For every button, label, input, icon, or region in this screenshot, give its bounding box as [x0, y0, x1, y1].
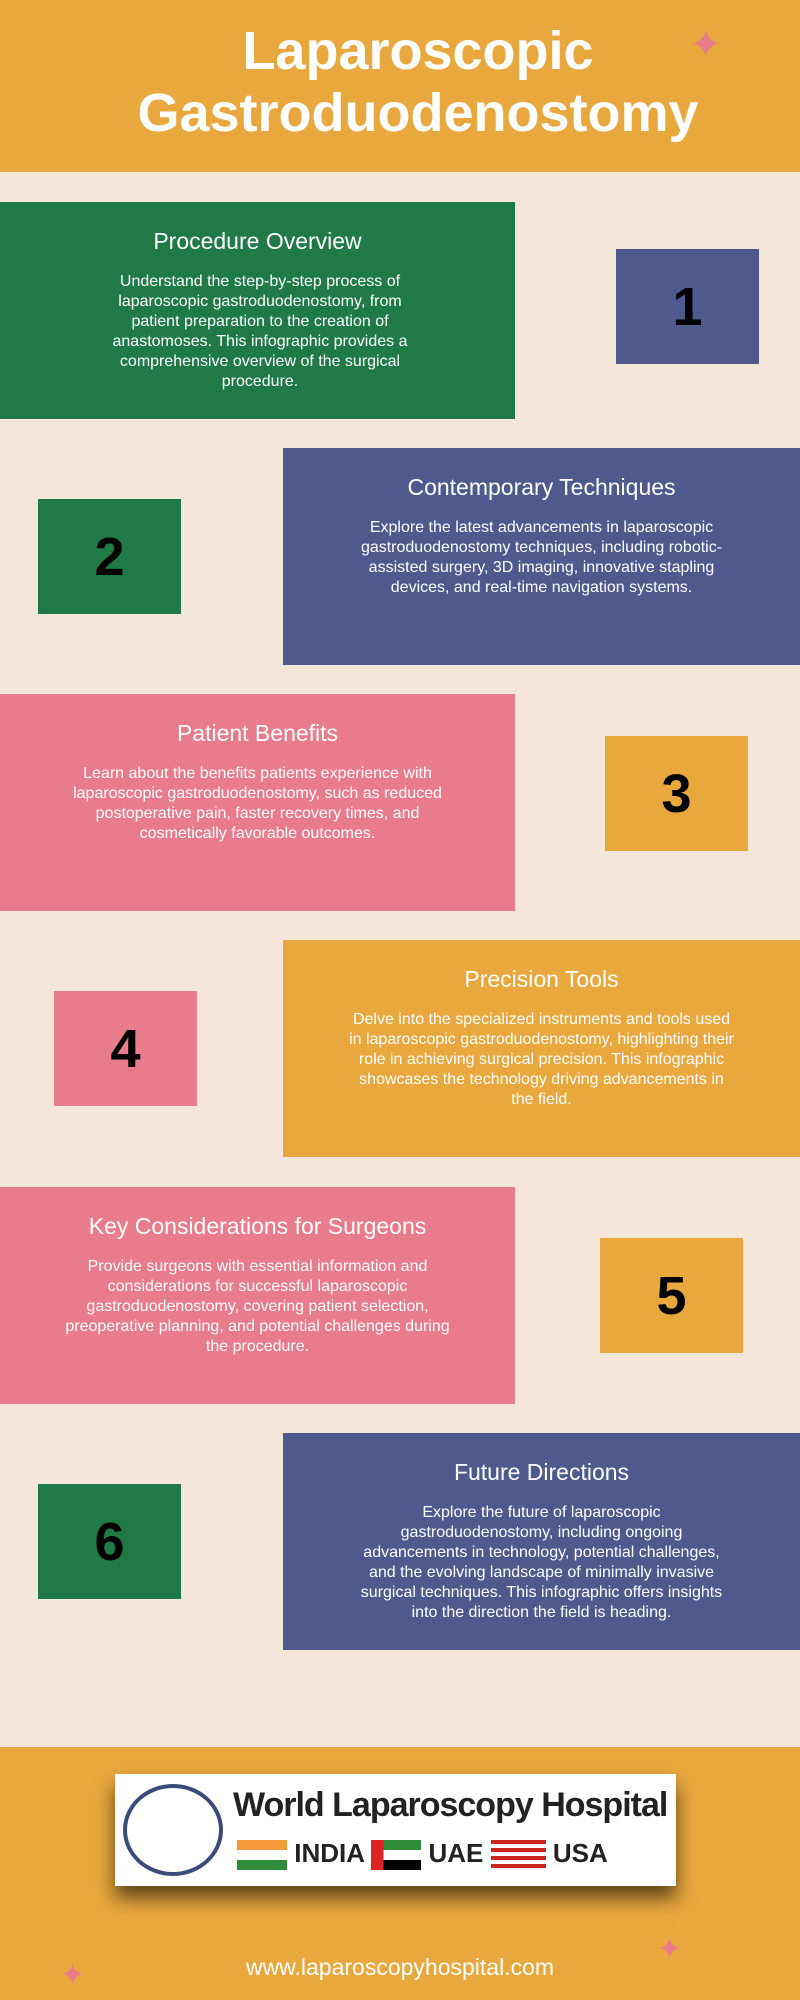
panel: patient benefits — [0, 694, 515, 911]
panel: future directions: Explore the future of laparoscopic gastroduodenostomy, including ongoing advancements in technology, potential challenges, and the evolving landscape of minimally invasive surgical techniques. This infographic offers insights into the direction the field is heading. — [361, 1504, 722, 1621]
logo — [115, 1774, 676, 1886]
panel: precision tools: Delve into the specialized instruments and tools used in laparoscopic gastroduodenostomy, highlighting their role in achieving surgical precision. This infographic showcases the technology driving advancements in the field. — [349, 1011, 734, 1108]
panel: contemporary techniques — [283, 448, 800, 665]
website url: www.laparoscopyhospital.com — [246, 1954, 554, 1980]
panel: key considerations — [0, 1187, 515, 1404]
panel: patient benefits: Learn about the benefits patients experience with laparoscopic gastroduodenostomy, such as reduced postoperative pain, faster recovery times, and cosmetically favorable outcomes. — [73, 765, 442, 842]
number 5 — [600, 1238, 743, 1353]
panel: procedure overview: Understand the step-by-step process of laparoscopic gastroduodenostomy, from patient preparation to the creation of anastomoses. This infographic provides a comprehensive overview of the surgical procedure. — [112, 273, 407, 390]
number 6 — [38, 1484, 181, 1599]
panel: precision tools: Precision Tools — [464, 966, 619, 992]
logo: World Laparoscopy Hospital — [233, 1786, 667, 1824]
panel: procedure overview — [0, 202, 515, 419]
number 6: 6 — [94, 1512, 125, 1572]
number 2 — [38, 499, 181, 614]
title — [137, 21, 699, 143]
number 3 — [605, 736, 748, 851]
icon: star footer left: ✦ — [60, 1959, 85, 1992]
panel: key considerations: Provide surgeons with essential information and considerations for successful laparoscopic gastroduodenostomy, covering patient selection, preoperative planning, and potential challenges during the procedure. — [65, 1258, 450, 1355]
number 4 — [54, 991, 197, 1106]
panel: future directions: Future Directions — [454, 1459, 629, 1485]
number 1 — [616, 249, 759, 364]
number 4: 4 — [110, 1018, 141, 1078]
panel: patient benefits: Patient Benefits — [177, 720, 338, 746]
panel: key considerations: Key Considerations for Surgeons — [89, 1213, 426, 1239]
title: Laparoscopic — [242, 21, 594, 81]
title: Gastroduodenostomy — [137, 83, 699, 143]
panel: future directions — [283, 1433, 800, 1650]
number 1: 1 — [672, 276, 703, 336]
footer — [0, 1747, 800, 2000]
icon: star header: ✦ — [689, 23, 723, 67]
panel: contemporary techniques: Contemporary Techniques — [407, 474, 676, 500]
panel: precision tools — [283, 940, 800, 1157]
number 3: 3 — [661, 764, 692, 824]
icon: star footer right: ✦ — [657, 1933, 682, 1966]
panel: procedure overview: Procedure Overview — [153, 228, 362, 254]
panel: contemporary techniques: Explore the latest advancements in laparoscopic gastroduodenostomy techniques, including robotic-assisted surgery, 3D imaging, innovative stapling devices, and real-time navigation systems. — [361, 519, 722, 596]
logo: INDIA UAE USA — [294, 1838, 608, 1868]
number 5: 5 — [656, 1266, 687, 1326]
number 2: 2 — [94, 526, 125, 586]
header — [0, 0, 800, 172]
